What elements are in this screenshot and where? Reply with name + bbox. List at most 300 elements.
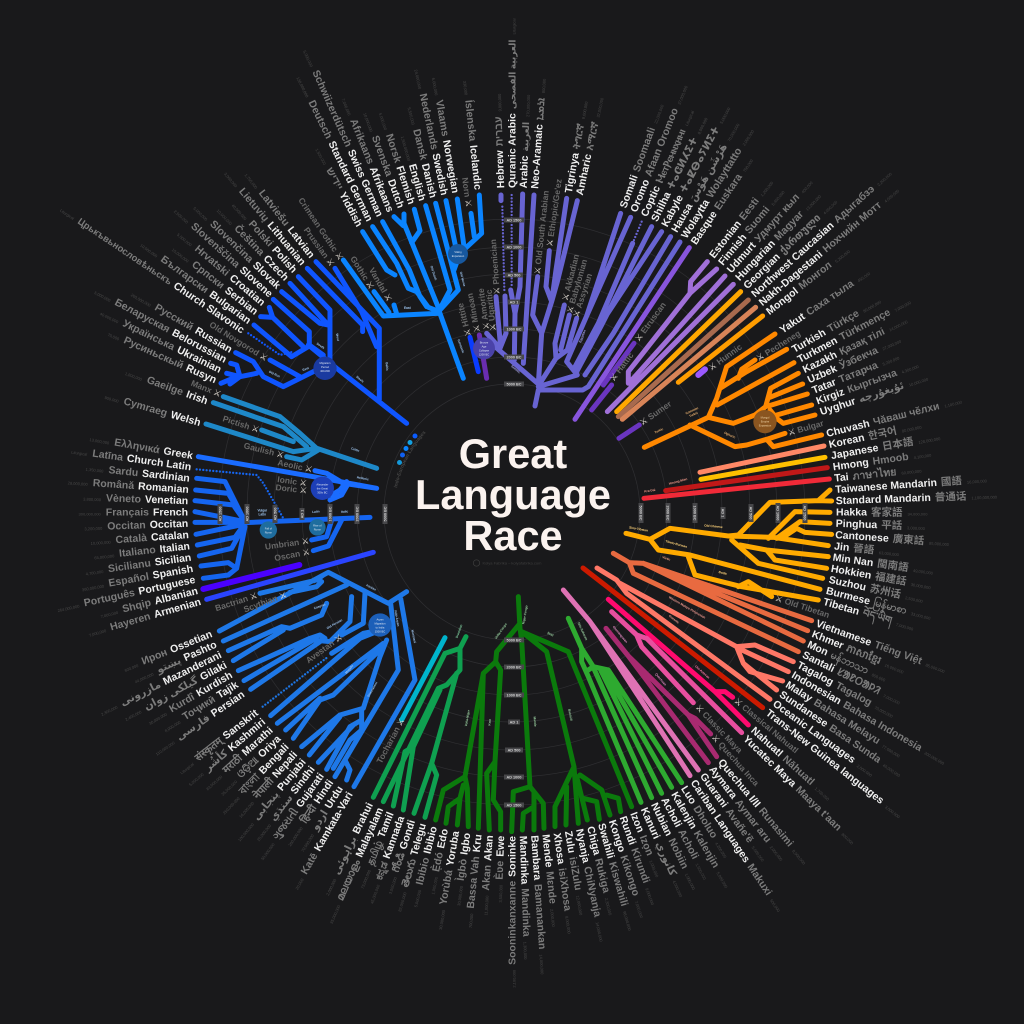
tree: Celtic and Balto-Slavic languages (206, 262, 407, 468)
labels: clockwise languages from Hebrew to Uyghur: SomaliSoomaali22,000,000 (618, 101, 667, 210)
labels: clockwise languages from Armenian to Greek: 300,000,000 Français French (79, 506, 188, 518)
tree: Italic, Hellenic, Albanian, Armenian: 300s BC (317, 490, 327, 494)
labels: clockwise languages from Vietnamese to Yucatec Maya: MalayBahasa Melayu77,000,000 (783, 679, 904, 761)
labels: clockwise languages from Persian to Ossetian: 110,000,000فارسیPersian (152, 689, 247, 758)
tree: Tocharian, Dravidian, Nilo-Saharan, Niger-Congo: Kwa (488, 719, 492, 726)
labels: clockwise languages from Yiddish to Icelandic: 6,000,000 Vlaams Norwegian (429, 76, 461, 194)
labels: extinct languages reading inward: Vandal ⚔ (367, 266, 394, 303)
labels: extinct languages reading inward: Tocharian ⚔ (374, 716, 407, 765)
tree: Austronesian and the Americas: Quechuan (654, 672, 667, 687)
labels: extinct languages reading outward: ⚔ Akkadian (560, 253, 581, 302)
tree: Celtic and Balto-Slavic languages: Migration (320, 361, 331, 365)
labels: clockwise languages from Vietnamese to Yucatec Maya: Yucatec MayaMaaya t'aan 800,000 (741, 733, 858, 847)
tree: Indo-Iranian languages: 1500 BC (375, 630, 385, 634)
labels: clockwise languages from Quechua to Mandinka: Swahili Kiswahili 98,000,000 (595, 822, 637, 932)
labels: clockwise languages from Welsh to Latvian: 70,000РусиньскыйRusyn (106, 327, 218, 386)
labels: clockwise languages from Armenian to Greek: 13,000,000 ΕλληνικάGreek (89, 432, 194, 462)
date pills: right axis: AD 1000 (776, 506, 780, 520)
tree: Turkic languages (644, 334, 822, 447)
labels: clockwise languages from Soninke to Brahui: 30,000,000ÌgbòIgbo (450, 832, 473, 906)
labels: clockwise languages from Kamkata-Vari to Sanskrit (176, 707, 356, 892)
labels: clockwise languages from Vietnamese to Yucatec Maya: Monမန်ဘာသာ850,000 (804, 638, 889, 688)
labels: clockwise languages from Soninke to Brahui: 2,000,000براہوئیBrahui (321, 801, 376, 897)
labels: clockwise languages from Welsh to Latvian: 10,000,000СрпскиSerbian (170, 243, 260, 318)
labels: clockwise languages from Quechua to Mandinka: Mende Mɛnde 2,000,000 (539, 834, 561, 928)
tree: Celtic and Balto-Slavic languages: Celtic (351, 446, 360, 453)
title: Language (415, 471, 611, 518)
labels: clockwise languages from Vietnamese to Yucatec Maya: Trans-New Guinea languages3,000,000 (763, 707, 905, 821)
labels: clockwise languages from Kamkata-Vari to Sanskrit: 55,000,000ગુજરાતીGujarati (254, 770, 327, 862)
labels: clockwise languages from Hebrew to Uyghur: OromoAfaan Oromoo37,000,000 (628, 82, 691, 214)
tree: Turkic languages: Empire (761, 420, 770, 424)
tree: Sino-Tibetan, Korean, Japanese, Hmong, Tai, Austroasiatic: Bodic (718, 570, 728, 576)
labels: clockwise languages from Chuvash to Tibetan: Burmeseမြန်မာစာ 33,000,000 (824, 583, 933, 626)
tree: Turkic languages: Turkic (654, 427, 664, 435)
labels: clockwise languages from Welsh to Latvian: 2,500,000SlovenščinaSlovene (171, 205, 275, 300)
labels: clockwise languages from Hebrew to Uyghur: TatarТатарча 5,200,000 (810, 350, 902, 397)
date pills: top axis: 2000 BC (506, 356, 522, 360)
labels: clockwise languages from Armenian to Greek: 65,000,000 Italiano Italian (94, 540, 190, 562)
labels: clockwise languages from Persian to Ossetian: 8,000,000ТоҷикӣTajik (161, 679, 241, 735)
tree: Italic, Hellenic, Albanian, Armenian: Latin (312, 509, 320, 514)
labels: clockwise languages from Welsh to Latvian: 1,800,000GaeilgeIrish (124, 366, 209, 407)
labels: clockwise languages from Hebrew to Uyghur: MongolМонгол5,200,000 (764, 244, 853, 318)
labels: clockwise languages from Yiddish to Icelandic: 5,000,000 Schwiizerdütsch Swiss German (300, 47, 385, 219)
labels: clockwise languages from Persian to Ossetian: 30,000,000KurdîKurdish (145, 669, 235, 728)
date pills: top axis: 1000 BC (506, 328, 522, 332)
tree: Tocharian, Dravidian, Nilo-Saharan, Niger-Congo: Dravidian (455, 624, 463, 639)
tree: Italic, Hellenic, Albanian, Armenian: Rome (314, 527, 321, 531)
tree: Indo-Iranian languages: Magahi (344, 664, 354, 675)
labels: clockwise languages from Chuvash to Tibetan: Tai ภาษาไทย 60,000,000 (834, 462, 923, 485)
author credit: Kolya Fabrika – kolyafabrika.com (482, 560, 542, 566)
tree: Italic, Hellenic, Albanian, Armenian: Italic (341, 509, 349, 514)
labels: clockwise languages from Yiddish to Icelandic: 330,000 Íslenska Icelandic (460, 80, 485, 191)
tree: Germanic languages (343, 195, 482, 378)
tree: Sino-Tibetan, Korean, Japanese, Hmong, Tai, Austroasiatic: Old Chinese (704, 524, 723, 529)
labels: clockwise languages from Vietnamese to Yucatec Maya: Khmerភាសាខ្មែរ16,000,000 (810, 627, 907, 677)
labels: extinct languages reading outward: ⚔ Assyrian (571, 272, 594, 319)
legend: Indo-European Languages dots and arc label: Indo-European Languages (394, 431, 426, 488)
tree: Germanic languages: Old Dutch (429, 265, 438, 281)
labels: extinct languages reading inward: Norn ⚔ (460, 177, 474, 208)
labels: clockwise languages from Vietnamese to Yucatec Maya: VietnameseTiếng Việt 85,000,000 (814, 618, 948, 676)
tree: Germanic languages: Germanic (457, 339, 465, 354)
tree: Sino-Tibetan, Korean, Japanese, Hmong, Tai, Austroasiatic (613, 446, 832, 652)
tree: Turkic languages: Oghuric (723, 431, 736, 440)
tree: Language isolates and Uralic (575, 248, 763, 438)
labels: clockwise languages from Hebrew to Uyghur: Tigrinyaትግርኛ9,000,000 (563, 100, 591, 194)
labels: clockwise languages from Soninke to Brahui: 1,000,000Ẹ̀dóEdo (424, 827, 451, 895)
labels: clockwise languages from Soninke to Brahui: 5,000,000IbibioIbibio (408, 825, 440, 908)
date pills: right axis: AD 1500 (802, 506, 806, 520)
date pills: right axis: 2000 BC (666, 506, 670, 521)
tree: Semitic and Afroasiatic languages: Egyptian (578, 329, 587, 343)
labels: clockwise languages from Quechua to Mandinka: AymaraAymar aru 2,000,000 (706, 764, 788, 864)
date pills: left axis: 1000 BC (328, 506, 332, 522)
labels: clockwise languages from Quechua to Mandinka: Kanuri كانوري‎ 4,000,000 (638, 806, 688, 899)
tree: Italic, Hellenic, Albanian, Armenian: Alexander (316, 482, 328, 486)
tree: Austronesian and the Americas: Oceanic (668, 614, 680, 625)
labels: clockwise languages from Soninke to Brahui: 82,000,000తెలుగుTelegu (392, 822, 429, 913)
labels: clockwise languages from Armenian to Greek: 360,000,000 EspañolSpanish (81, 563, 194, 594)
labels: clockwise languages from Persian to Ossetian: 600,000ИронOssetian (122, 628, 214, 675)
labels: extinct languages reading outward: ⚔ Bulgar (787, 418, 825, 438)
labels: extinct languages reading inward: Ionic ⚔ (277, 474, 308, 488)
title (415, 430, 611, 559)
tree: Celtic and Balto-Slavic languages: Slavic (355, 375, 365, 384)
labels: clockwise languages from Hebrew to Uyghur: Neo-Aramaicܐܪܡܝܐ‎800,000 (529, 77, 549, 189)
labels: clockwise languages from Quechua to Mandinka: Izon Izọn 1,000,000 (627, 810, 665, 879)
labels: clockwise languages from Kamkata-Vari to Sanskrit: 5,000,000كأشُرKashmiri (183, 714, 268, 789)
tree: Celtic and Balto-Slavic languages: Period (321, 365, 329, 369)
labels: clockwise languages from Hebrew to Uyghur: YakutСаха тыла450,000 (778, 266, 873, 336)
labels: clockwise languages from Kamkata-Vari to Sanskrit: 35,000,000ଓଡ଼ିଆOriya (216, 732, 284, 798)
labels: clockwise languages from Yiddish to Icelandic: 130,000,000 Deutsch Standard German (294, 74, 375, 224)
labels: clockwise languages from Chuvash to Tibetan: Suzhou苏州话 2,500,000 (828, 573, 925, 606)
labels: clockwise languages from Chuvash to Tibetan: Japanese日本語 128,000,000 (830, 430, 942, 462)
labels: extinct languages reading inward: Prussian ⚔ (302, 225, 337, 268)
labels: clockwise languages from Hebrew to Uyghur: EstonianEesti1,200,000 (707, 177, 776, 261)
date pills: right axis (638, 503, 808, 523)
labels: clockwise languages from Kamkata-Vari to Sanskrit: 83,000,000मराठीMarathi (201, 724, 276, 793)
tree: Turkic languages: Mongol (761, 416, 770, 420)
labels: clockwise languages from Quechua to Mandinka: Bambara Bamanankan 14,000,000 (528, 835, 550, 975)
labels: clockwise languages from Hebrew to Uyghur: Nakh-DagestaniНохчийн Мотт4,000,000 (757, 184, 902, 309)
tree: Italic, Hellenic, Albanian, Armenian: Vulgar (257, 508, 268, 512)
labels: extinct languages reading outward: ⚔ Classical Nahuatl (732, 696, 800, 755)
labels: clockwise languages from Chuvash to Tibetan: Jin 晉語 63,000,000 (834, 539, 901, 559)
tree: Semitic and Afroasiatic languages: Semitic (510, 364, 521, 375)
tree: Semitic and Afroasiatic languages: Bronze (480, 340, 489, 344)
title: Great (459, 430, 567, 477)
tree: Italic, Hellenic, Albanian, Armenian: the Great (317, 486, 328, 490)
labels: clockwise languages from Hebrew to Uyghur: Northwest CaucasianАдыгабзэ2,200,000 (749, 167, 895, 300)
labels: clockwise languages from Yiddish to Icelandic: 1,500,000 ייִדישYiddish (313, 145, 365, 229)
labels: clockwise languages from Chuvash to Tibetan: Standard Mandarin 普通话 1,100,000,000 (836, 489, 998, 507)
labels: clockwise languages from Yiddish to Icelandic: 7,000,000 Afrikaans Afrikaans (339, 96, 396, 214)
tree: Indo-Iranian languages: Shauraseni (366, 681, 378, 698)
labels: clockwise languages from Yiddish to Icelandic (294, 47, 485, 229)
labels: clockwise languages from Hebrew to Uyghur: Amharicአማርኛ32,000,000 (574, 96, 607, 196)
labels: clockwise languages from Welsh to Latvian: 1,750,000LatviešuLatvian (242, 170, 317, 261)
tree: Italic, Hellenic, Albanian, Armenian: Latin (259, 513, 266, 517)
labels: clockwise languages from Welsh to Latvian: 5,500,000HrvatskiCroatian (175, 228, 267, 309)
tree: Germanic languages: Old Norse (459, 271, 467, 287)
tree: Sino-Tibetan, Korean, Japanese, Hmong, Tai, Austroasiatic: Hmong-Mien (668, 477, 688, 486)
labels: extinct languages reading outward: ⚔ Babylonian (564, 258, 589, 314)
date pills: top axis: AD 1000 (506, 246, 522, 250)
labels: clockwise languages from Persian to Ossetian: 2,300,000مازرونیMazanderani (98, 649, 224, 719)
date pills: bottom axis: 2000 BC (506, 666, 522, 670)
tree: Germanic languages: Expansion (452, 254, 465, 258)
date pills: bottom axis: AD 500 (508, 748, 520, 752)
labels: clockwise languages from Yiddish to Icelandic: 1,500,000,000 English (398, 134, 428, 202)
labels: clockwise languages from Kamkata-Vari to Sanskrit: 70,000,000اردوUrdu (296, 784, 346, 854)
labels: clockwise languages from Hebrew to Uyghur: Georgianქართული4,000,000 (741, 195, 840, 292)
labels: clockwise languages from Yiddish to Icelandic: 24,000,000 Nederlands Swedish (411, 68, 450, 196)
labels: clockwise languages from Quechua to Mandinka: Xhosa isiXhosa 8,000,000 (551, 832, 577, 935)
labels: clockwise languages from Chuvash to Tibetan: Korean한국어 80,000,000 (828, 419, 923, 451)
date pills: top axis: AD 500 (508, 274, 520, 278)
labels: clockwise languages from Hebrew to Uyghur: UdmurtУдмурт кыл400,000 (725, 176, 816, 276)
date pills: bottom axis: 1000 BC (506, 694, 522, 698)
labels: clockwise languages from Quechua to Mandinka: GuaraniAvañe'ẽ 5,000,000 (697, 771, 770, 864)
labels: extinct languages reading outward (455, 178, 831, 788)
labels: extinct languages reading outward: ⚔ Ethiopic/Ge'ez (544, 178, 564, 247)
labels: clockwise languages from Yiddish to Icelandic: 10,000,000 Svenska Dutch (360, 110, 406, 210)
labels: clockwise languages from Quechua to Mandinka: KalenjinKalenjin 5,000,000 (668, 790, 733, 890)
tree: Semitic and Afroasiatic languages: 1200 BC (479, 352, 489, 356)
labels: extinct languages reading outward: ⚔ Etruscan (633, 300, 668, 343)
labels: clockwise languages from Persian to Ossetian: 2,400,000گیلکی زوانGilaki (121, 658, 229, 724)
labels: clockwise languages from Welsh to Latvian: 10,000,000БългарскиBulgarian (138, 239, 253, 327)
labels: clockwise languages from Hebrew to Uyghur: FinnishSuomi5,400,000 (716, 186, 788, 268)
labels: extinct languages reading inward: Aeolic ⚔ (277, 457, 313, 474)
tree: Semitic and Afroasiatic languages: Collapse (479, 348, 490, 352)
labels: extinct languages reading outward: ⚔ Phoenician (488, 239, 502, 295)
tree: Indo-Iranian languages (219, 572, 417, 787)
date pills: right axis: AD 500 (748, 507, 752, 519)
tree: Tocharian, Dravidian, Nilo-Saharan, Niger-Congo: Ijoid (547, 631, 554, 638)
tree: Indo-Iranian languages: Iranian (366, 583, 377, 592)
tree: Sino-Tibetan, Korean, Japanese, Hmong, Tai, Austroasiatic: Vietic (662, 555, 671, 562)
labels: clockwise languages from Soninke to Brahui (321, 801, 518, 988)
labels: extinct languages reading inward (190, 177, 474, 765)
labels: clockwise languages from Quechua to Mandinka: Nubian Nobiin 1,000,000 (648, 801, 701, 892)
labels: clockwise languages from Kamkata-Vari to Sanskrit: 250,000,000বাংলাBengali (218, 741, 292, 817)
labels: clockwise languages from Welsh to Latvian: 3,000,000LietuviųLithuanian (222, 168, 308, 268)
labels: extinct languages reading inward: Avestan ⚔ (304, 632, 344, 665)
labels: extinct languages reading outward: ⚔ Ugaritic (484, 289, 498, 332)
date pills: left axis: AD 1000 (246, 506, 250, 522)
date pills: left axis: AD 1500 (218, 506, 222, 522)
labels: clockwise languages from Soninke to Brahui: 2,100,000SooninkanxanneSoninke (506, 836, 518, 988)
date pills: left axis: AD 500 (274, 508, 278, 520)
labels: clockwise languages from Vietnamese to Yucatec Maya: SundaneseBasa Sunda40,000,000 (777, 689, 905, 780)
tree: Tocharian, Dravidian, Nilo-Saharan, Niger-Congo (373, 597, 682, 832)
tree: Germanic languages: East (404, 306, 412, 310)
labels: clockwise languages from Soninke to Brahui: 11,000,000AkanAkan (478, 835, 496, 916)
tree: Celtic and Balto-Slavic languages: South (316, 342, 325, 350)
tree: Indo-Iranian languages: Migration (375, 622, 386, 626)
labels: clockwise languages from Soninke to Brahui: 45,000,000ಕನ್ನಡKannada (365, 814, 408, 906)
tree: Celtic and Balto-Slavic languages: Baltic (385, 362, 389, 371)
tree: Tocharian, Dravidian, Nilo-Saharan, Niger-Congo: Nilo-Saharan (577, 622, 589, 641)
labels: clockwise languages from Soninke to Brahui: 3,500,000ÈʋeEwe (492, 835, 507, 903)
date pills: bottom axis: AD 1500 (506, 804, 522, 808)
labels: clockwise languages from Kamkata-Vari to Sanskrit: 20,000KatēKamkata-Vari (290, 790, 356, 892)
labels: extinct languages reading outward: ⚔ Minoan (465, 292, 482, 333)
labels: clockwise languages from Chuvash to Tibetan: Hokkien福建話 30,000,000 (830, 562, 933, 592)
date pills: bottom axis: AD 1000 (506, 776, 522, 780)
labels: clockwise languages from Welsh to Latvian: LiturgicalЦрькъвьнословѣньскъChurch Slavonic (58, 204, 247, 336)
labels: clockwise languages from Chuvash to Tibetan: Min Nan閩南語 49,000,000 (832, 551, 935, 578)
tree: Indo-Iranian languages: Indo-Aryan (394, 610, 400, 627)
labels: clockwise languages from Armenian to Greek: 7,000,000ShqipAlbanian (99, 585, 199, 621)
labels: extinct languages reading inward: Gothic ⚔ (348, 254, 376, 291)
labels: clockwise languages from Quechua to Mandinka: Nyanja ChiNyanja 14,000,000 (573, 828, 609, 943)
tree: Anatolian and Minoan stubs (470, 335, 487, 378)
tree: Semitic and Afroasiatic languages (473, 194, 680, 406)
labels: clockwise languages from Hebrew to Uyghur: CopticⲘⲉⲧⲢⲉⲙⲛⲭⲏⲙⲓLiturgical (639, 108, 697, 219)
labels: clockwise languages from Welsh to Latvian: 10,000,000ČeštinaCzech (214, 204, 292, 283)
tree: Austronesian and the Americas: Western Malayo-Polynesian (668, 595, 706, 620)
labels: extinct languages reading outward: ⚔ Hunnic (706, 342, 744, 373)
tree: Sino-Tibetan, Korean, Japanese, Hmong, Tai, Austroasiatic: Sino-Tibetan (629, 525, 648, 533)
labels: clockwise languages from Quechua to Mandinka: Chiga Rukiga 2,300,000 (584, 825, 618, 917)
labels: extinct languages reading outward: ⚔ Classic Maya (694, 702, 745, 755)
labels: extinct languages reading inward: Umbrian ⚔ (264, 536, 310, 552)
labels: clockwise languages from Persian to Ossetian (98, 628, 247, 758)
author credit (473, 560, 542, 566)
date pills: right axis: 1000 BC (692, 506, 696, 521)
labels: clockwise languages from Chuvash to Tibetan (821, 394, 998, 637)
labels: clockwise languages from Hebrew to Uyghur: Kabyleⵜⴰⵇⴱⴰⵢⵍⵉⵜ5,000,000 (659, 104, 734, 229)
labels: clockwise languages from Armenian to Greek: 28,000,000 Română Romanian (67, 475, 189, 496)
tree: Celtic and Balto-Slavic languages: Old Rus (268, 370, 281, 379)
labels: clockwise languages from Yiddish to Icelandic: 5,500,000 Dansk Danish (405, 106, 439, 199)
labels: clockwise languages from Welsh to Latvian: 40,000,000PolskiPolish (229, 200, 299, 276)
labels: clockwise languages from Soninke to Brahui: 75,000,000தமிழ்Tamil (355, 810, 398, 891)
tree: Austronesian and the Americas (563, 568, 793, 776)
labels: clockwise languages from Armenian to Greek: 10,000,000 Català Catalan (90, 529, 189, 548)
labels: clockwise languages from Vietnamese to Yucatec Maya: IndonesianBahasa Indonesia200,000,000 (789, 669, 948, 768)
tree: Indo-Iranian languages: to India (376, 626, 385, 630)
labels: clockwise languages from Vietnamese to Yucatec Maya (741, 618, 948, 847)
labels: clockwise languages from Chuvash to Tibetan: Pinghua 平話 3,000,000 (836, 517, 926, 533)
tree: Semitic and Afroasiatic languages: Age (482, 344, 487, 348)
labels: clockwise languages from Quechua to Mandinka: Rundi Kirundi 9,000,000 (617, 815, 660, 907)
tree: Germanic languages: Viking (454, 250, 462, 254)
labels: clockwise languages from Hebrew to Uyghur: TurkishTürkçe80,000,000 (790, 295, 884, 356)
labels: clockwise languages from Hebrew to Uyghur: Hausaهَرْشَن هَوْسَ‎70,000,000 (669, 119, 743, 235)
labels: clockwise languages from Quechua to Mandinka: LuoDholuo 4,200,000 (678, 784, 732, 861)
labels: clockwise languages from Soninke to Brahui: 30,000,000YorùbáYoruba (433, 830, 462, 931)
tree: Tocharian, Dravidian, Nilo-Saharan, Niger-Congo: Mande (533, 716, 537, 727)
tree: Turkic languages: Turkic (689, 411, 699, 418)
title: Race (463, 512, 563, 559)
tree: Indo-Iranian languages: Old Persian (326, 618, 343, 630)
labels: clockwise languages from Soninke to Brahui: 700,000Bassa VahKru (463, 834, 485, 928)
labels: clockwise languages from Armenian to Greek: 264,000,000 PortuguêsPortuguese (56, 574, 197, 615)
labels: clockwise languages from Hebrew to Uyghur: Shilhaⵜⴰⵛⵍⵃⵉⵜ8,000,000 (649, 114, 711, 224)
tree: Turkic languages: Common (685, 406, 699, 415)
labels: extinct languages reading outward: ⚔ Old Tibetan (774, 593, 831, 620)
tree: Italic, Hellenic, Albanian, Armenian (195, 457, 377, 599)
labels: clockwise languages from Quechua to Mandinka: Cariban LanguagesMakuxi 500,000 (688, 778, 786, 915)
labels: clockwise languages from Vietnamese to Yucatec Maya: Santaliᱥᱟᱱᱛᱟᱞᱤ7,000,000 (800, 649, 903, 708)
labels: extinct languages reading inward: Gaulish ⚔ (243, 440, 285, 460)
labels: clockwise languages from Kamkata-Vari to Sanskrit: 16,000,000नेपालीNepali (234, 748, 300, 820)
labels: clockwise languages from Kamkata-Vari to Sanskrit: Liturgicalसंस्कृतम्Sanskrit (176, 707, 262, 778)
labels: clockwise languages from Hebrew to Uyghur: HungarianMagyar13,000,000 (733, 190, 824, 283)
labels: clockwise languages from Hebrew to Uyghur: Arabicالعربية‎270,000,000 (518, 94, 533, 188)
labels: clockwise languages from Yiddish to Icelandic: 5,000,000 Norsk Flemish (376, 111, 417, 206)
labels: clockwise languages from Soninke to Brahui: 35,000,000മലയാളംMalayalam (324, 806, 386, 925)
labels: clockwise languages from Chuvash to Tibetan: Taiwanese Mandarin 國語 16,000,000 (835, 472, 988, 496)
labels: clockwise languages from Hebrew to Uyghur: WolayttaWolayttatto2,000,000 (679, 126, 757, 241)
labels: clockwise languages from Quechua to Mandinka: AcholiAcholi 1,500,000 (658, 795, 712, 882)
labels: extinct languages reading outward: ⚔ Old South Arabian (532, 190, 551, 275)
date pills: top axis (504, 218, 524, 386)
labels: clockwise languages from Chuvash to Tibetan: Hakka 客家語 34,000,000 (836, 506, 928, 518)
labels: clockwise languages from Chuvash to Tibetan: HmongHmoob 4,100,000 (832, 448, 933, 473)
date pills: left axis: 5000 BC (384, 506, 388, 522)
date pills: right axis: 5000 BC (638, 506, 642, 521)
tree: Sino-Tibetan, Korean, Japanese, Hmong, Tai, Austroasiatic: Tibeto-Burman (665, 539, 688, 549)
date pills: top axis: 5000 BC (506, 382, 522, 386)
date pills: top axis: AD 1 (510, 300, 518, 304)
labels: clockwise languages from Chuvash to Tibetan: Tibetanབོད་ཡིག 7,000,000 (821, 593, 917, 637)
date pills: bottom axis (504, 638, 524, 808)
labels: clockwise languages from Welsh to Latvian: 5,000,000БеларускаяBelorussian (92, 286, 229, 366)
labels: extinct languages reading outward: ⚔ Hittite (455, 302, 473, 338)
labels: clockwise languages from Quechua to Mandinka: Mandinka Mandinka 1,300,000 (517, 836, 533, 960)
labels: clockwise languages from Soninke to Brahui: 3,000,000గోండిGondi (382, 818, 418, 895)
labels: clockwise languages from Vietnamese to Yucatec Maya: TagalogTagalog70,000,000 (795, 659, 897, 721)
date pills: bottom axis: AD 1 (510, 720, 518, 724)
labels: clockwise languages from Quechua to Mandinka: Kongo Kikongo 7,000,000 (606, 818, 649, 920)
labels: clockwise languages from Quechua to Mandinka (517, 757, 811, 975)
tree: Celtic and Balto-Slavic languages: West (335, 333, 340, 342)
labels: clockwise languages from Welsh to Latvian: 260,000,000РусскийRussian (129, 288, 234, 356)
labels: clockwise languages from Quechua to Mandinka: Zulu isiZulu 12,000,000 (562, 830, 589, 917)
tree: Austronesian and the Americas: Uto-Aztecan (694, 664, 711, 680)
tree: Turkic languages: Expansion (759, 424, 772, 428)
labels: extinct languages reading outward: ⚔ Pecheneg (754, 328, 802, 363)
labels: extinct languages reading outward: ⚔ Amorite (476, 287, 491, 330)
labels: clockwise languages from Vietnamese to Yucatec Maya: NahuatlNāhuatl 1,700,000 (748, 725, 834, 804)
labels: clockwise languages from Armenian to Greek: 3,800,000 Vèneto Venetian (83, 492, 188, 507)
labels: clockwise languages from Welsh to Latvian: 900,000 CymraegWelsh (103, 390, 202, 429)
labels: clockwise languages from Hebrew to Uyghur: Hebrewעברית‎9,000,000 (492, 93, 507, 188)
tree: Tocharian, Dravidian, Nilo-Saharan, Niger-Congo: Niger-Congo (521, 605, 529, 625)
labels: clockwise languages from Armenian to Greek: 1,350,000 Sardu Sardinian (85, 462, 190, 485)
labels: clockwise languages from Kamkata-Vari to Sanskrit: 100,000,000پنجابیPunjabi (233, 757, 309, 844)
tree: Italic, Hellenic, Albanian, Armenian: Hellenic (357, 475, 369, 481)
labels: clockwise languages from Hebrew to Uyghur: Quranic Arabicالعربية الفصحى‎Liturgical (506, 18, 518, 188)
labels: clockwise languages from Hebrew to Uyghur: TurkmenTürkmençe 7,000,000 (795, 295, 913, 366)
labels: clockwise languages from Chuvash to Tibetan: Cantonese 廣東話 85,000,000 (835, 528, 950, 549)
labels: clockwise languages from Chuvash to Tibetan: ChuvashЧӑваш чӗлхи 1,100,000 (825, 394, 964, 440)
tree: Italic, Hellenic, Albanian, Armenian: Fall of (265, 526, 272, 530)
date pills: left axis: AD 1 (300, 510, 304, 518)
tree: Tocharian, Dravidian, Nilo-Saharan, Niger-Congo: Volta-Congo (494, 622, 508, 640)
labels: extinct languages reading inward: Oscan ⚔ (274, 546, 311, 563)
labels: extinct languages reading inward: Old Novgorod ⚔ (208, 319, 270, 363)
labels: clockwise languages from Welsh to Latvian: 40,000,000УкраїнськаUkrainian (98, 307, 223, 376)
tree: Indo-Iranian languages: Aryan (376, 618, 384, 622)
date pills: bottom axis: 5000 BC (506, 638, 522, 642)
labels: clockwise languages from Hebrew to Uyghur (492, 18, 930, 418)
date pills: left axis (218, 504, 388, 524)
date pills: right axis: AD 1 (720, 509, 724, 517)
tree: Tocharian, Dravidian, Nilo-Saharan, Niger-Congo: Bantoid (567, 709, 573, 721)
date pills: left axis: 2000 BC (356, 506, 360, 522)
date pills: top axis: AD 1500 (506, 218, 522, 222)
tree: Celtic and Balto-Slavic languages: 400-800 (320, 369, 330, 373)
labels: clockwise languages from Armenian to Greek: 7,000,000HayerenArmenian (87, 596, 202, 640)
labels: clockwise languages from Hebrew to Uyghur: KirgizКыргызча 4,300,000 (815, 359, 921, 407)
labels: clockwise languages from Persian to Ossetian: 44,000,000پښتوPashto (132, 639, 219, 686)
labels: extinct languages reading inward: Manx ⚔ (190, 378, 223, 399)
labels: extinct languages reading inward: Bactrian ⚔ (214, 590, 259, 613)
labels: extinct languages reading outward: ⚔ Sumer (638, 398, 674, 428)
tree: Austronesian and the Americas: Otomanguean (612, 625, 628, 644)
labels: extinct languages reading outward: ⚔ Quechua Inca (710, 732, 761, 788)
labels: clockwise languages from Armenian to Greek (56, 432, 202, 640)
